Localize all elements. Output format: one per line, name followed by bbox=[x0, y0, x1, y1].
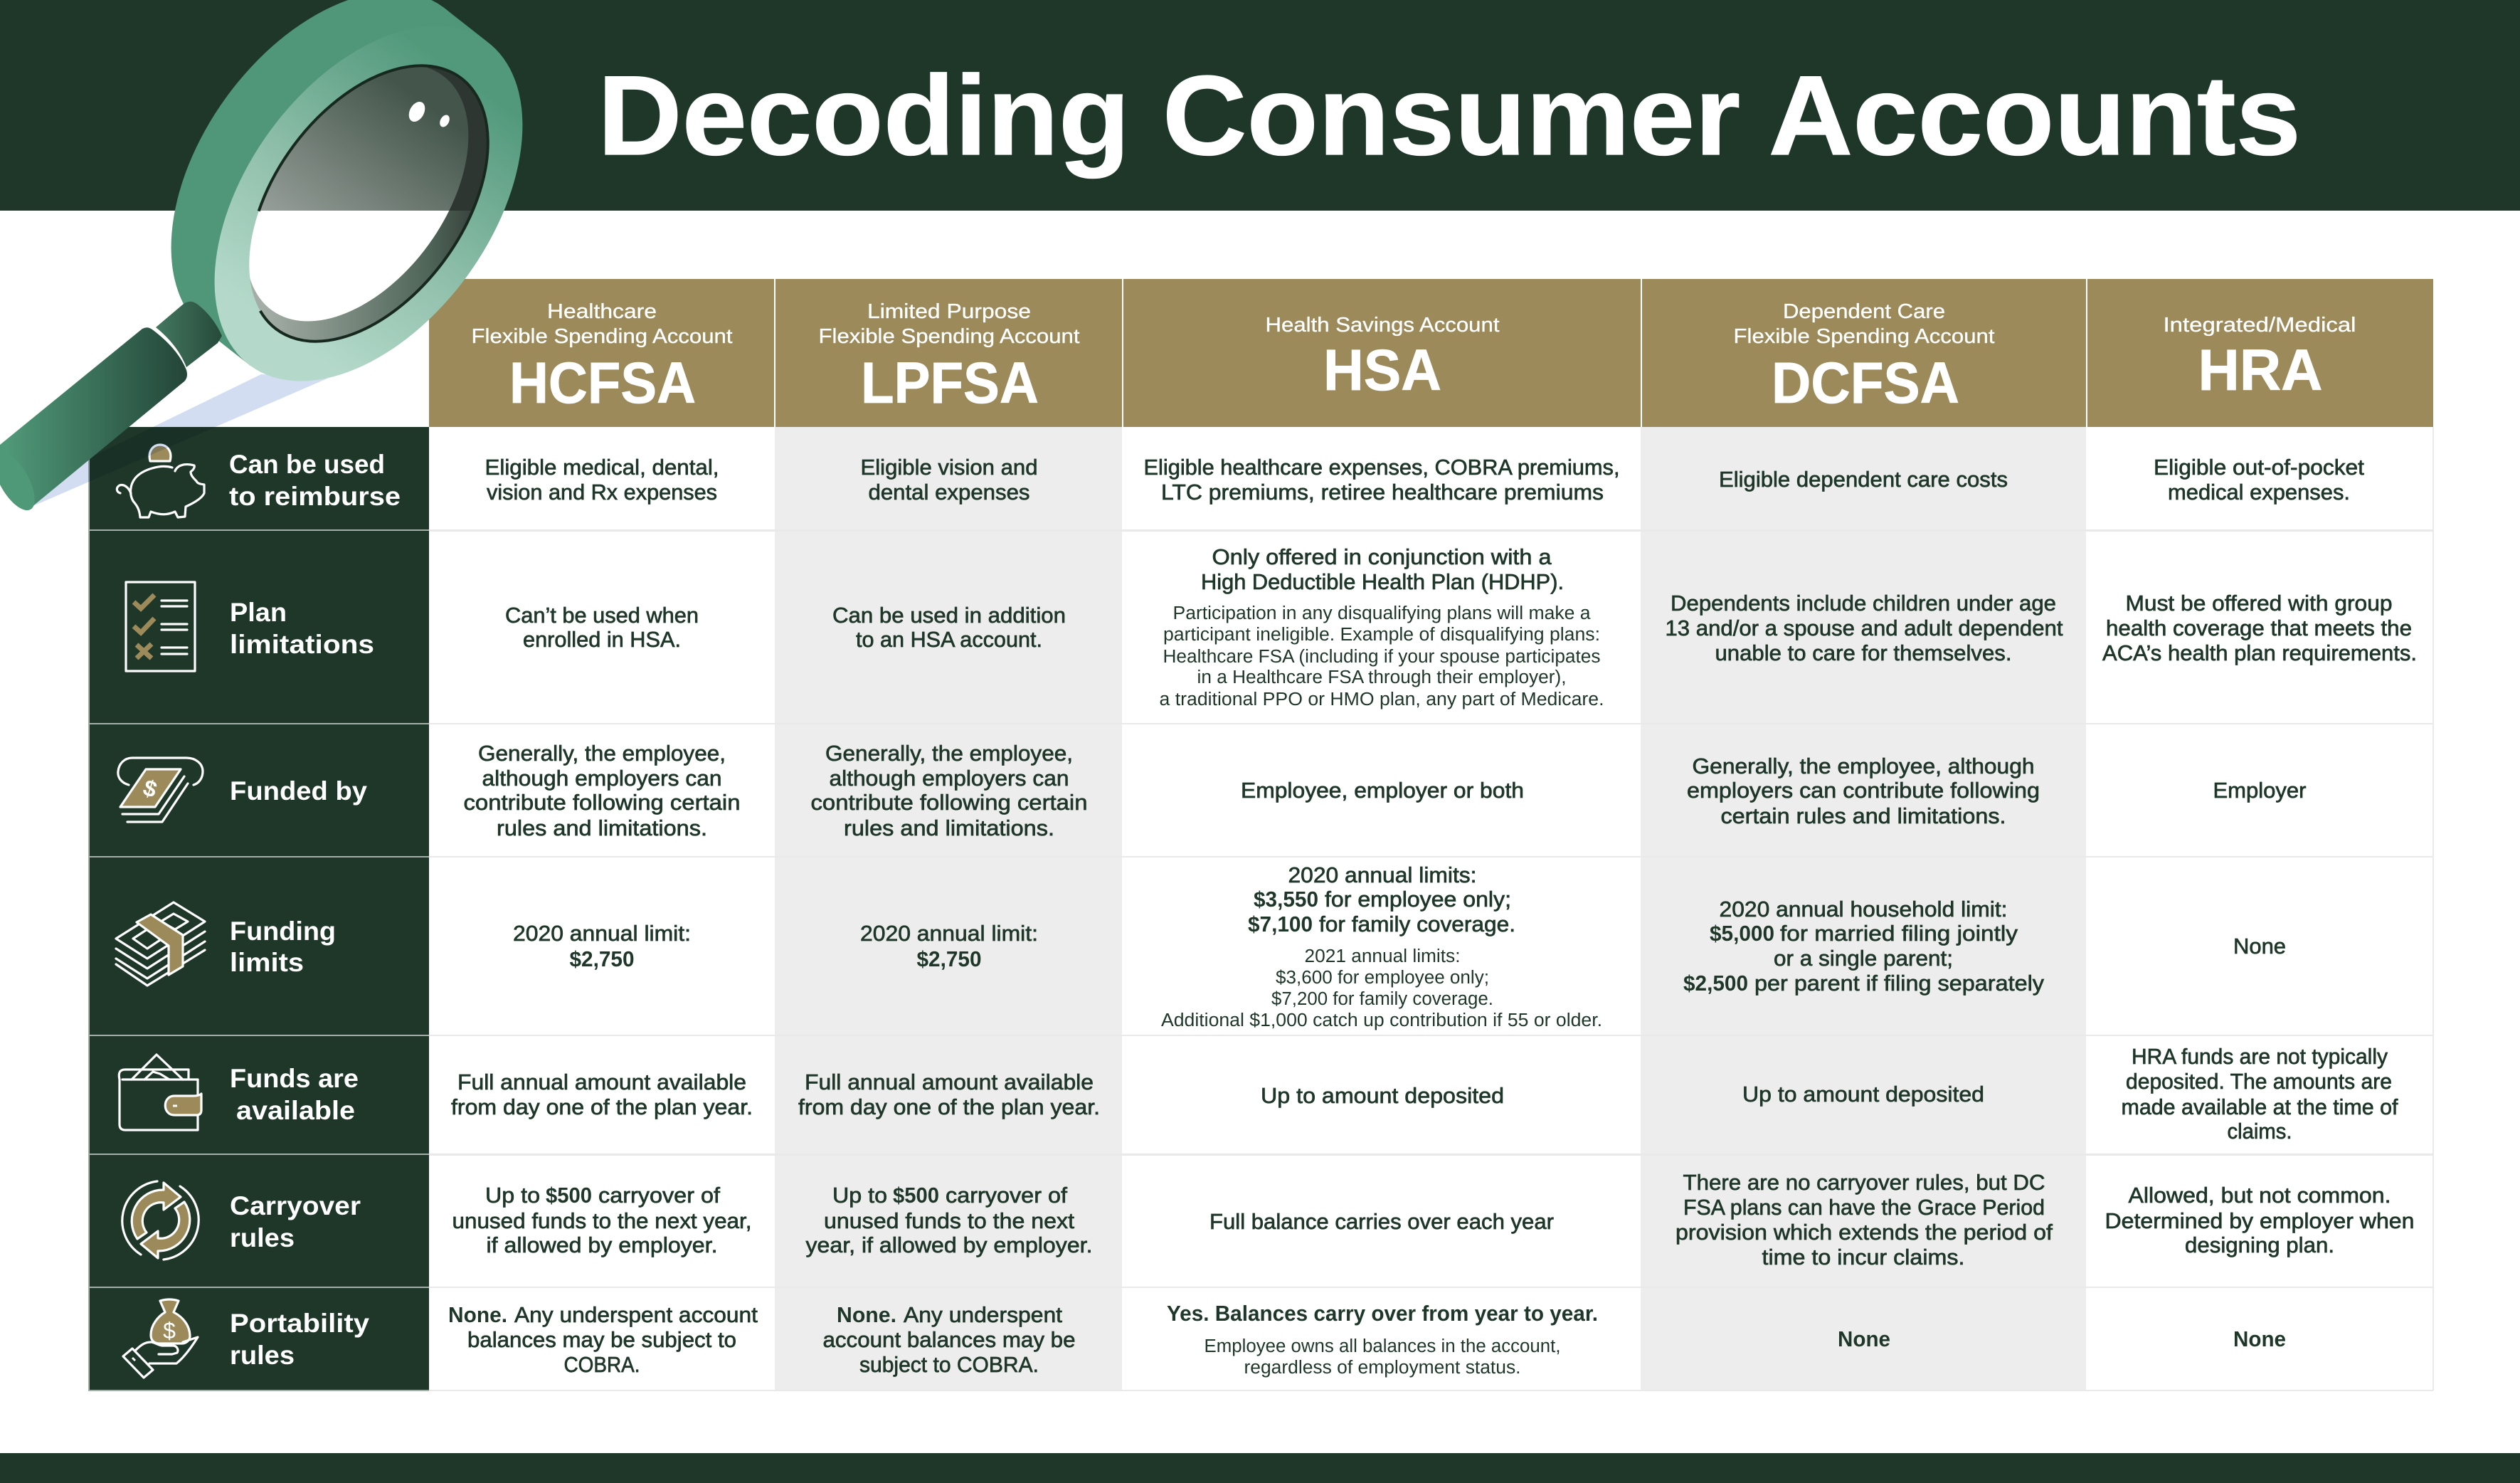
title: Decoding Consumer Accounts bbox=[598, 52, 2301, 179]
cell: HSA limits bbox=[1161, 863, 1602, 1030]
cell: HRA available: made available at the time of bbox=[2122, 1095, 2398, 1119]
header: HRA: Integrated/Medical bbox=[2163, 314, 2356, 337]
cell: LPFSA limits bbox=[860, 922, 1038, 971]
header: HSA: HSA bbox=[1323, 338, 1441, 403]
cell: HCFSA portability: COBRA. bbox=[563, 1353, 640, 1377]
cell: HSA reimburse: LTC premiums, retiree healthcare premiums bbox=[1161, 480, 1604, 505]
cell: HCFSA portability: None. bbox=[448, 1303, 507, 1327]
cell: HSA limitations: participant ineligible. Example of disqualifying plans: bbox=[1163, 625, 1600, 645]
cell: HRA available: deposited. The amounts are bbox=[2126, 1070, 2392, 1094]
cell: HRA limitations: Must be offered with group bbox=[2126, 591, 2392, 616]
label: funds are available: Funds are bbox=[230, 1064, 359, 1093]
cell: HCFSA reimburse: vision and Rx expenses bbox=[487, 480, 717, 505]
icon: carryover arrows bbox=[122, 1181, 198, 1260]
label: carryover rules: rules bbox=[230, 1223, 295, 1252]
label: funding limits: Funding bbox=[230, 917, 336, 946]
row: funds are available bbox=[451, 1045, 2398, 1144]
cell: HSA limits: 2020 annual limits: bbox=[1288, 863, 1477, 887]
label: can be used to reimburse bbox=[229, 450, 401, 511]
cell: HSA limitations: High Deductible Health Plan (HDHP). bbox=[1201, 570, 1564, 594]
footer bar bbox=[0, 1453, 2520, 1483]
cell: HCFSA reimburse: Eligible medical, dental, bbox=[485, 455, 719, 480]
row: carryover rules bbox=[452, 1171, 2415, 1270]
row: funding limits bbox=[513, 863, 2286, 1030]
label: funds are available bbox=[230, 1064, 359, 1125]
cell: HRA carryover: Determined by employer when bbox=[2105, 1209, 2415, 1233]
cell: DCFSA limits: 2020 annual household limit: bbox=[1719, 897, 2008, 922]
header: DCFSA bbox=[1733, 300, 1995, 416]
cell: LPFSA portability bbox=[822, 1303, 1076, 1377]
cell: HSA portability: Employee owns all balances in the account, bbox=[1204, 1336, 1561, 1356]
cell: HCFSA limitations: Can’t be used when bbox=[505, 603, 699, 628]
icon: piggy bank bbox=[117, 445, 204, 517]
header: HRA bbox=[2163, 314, 2356, 403]
label: funding limits: limits bbox=[230, 948, 304, 977]
cell: HRA limitations bbox=[2102, 591, 2417, 665]
cell: LPFSA funded by: contribute following certain bbox=[811, 791, 1087, 815]
cell: HCFSA reimburse bbox=[485, 455, 719, 505]
cell: HSA limitations: Participation in any disqualifying plans will make a bbox=[1172, 603, 1591, 623]
cell: LPFSA available: from day one of the plan year. bbox=[798, 1095, 1100, 1119]
cell: LPFSA carryover: year, if allowed by employer. bbox=[805, 1233, 1093, 1257]
cell: DCFSA available: Up to amount deposited bbox=[1742, 1082, 1984, 1107]
label: portability rules: Portability bbox=[230, 1309, 369, 1338]
header: LPFSA: Flexible Spending Account bbox=[818, 325, 1080, 348]
cell: HCFSA carryover bbox=[452, 1183, 751, 1257]
cell: DCFSA reimburse: Eligible dependent care costs bbox=[1719, 468, 2008, 492]
cell: HCFSA limitations: enrolled in HSA. bbox=[523, 628, 681, 652]
cell: HSA limitations: a traditional PPO or HMO plan, any part of Medicare. bbox=[1160, 690, 1604, 709]
cell: HRA limitations: ACA’s health plan requirements. bbox=[2102, 641, 2417, 665]
cell: HRA funded by: Employer bbox=[2213, 779, 2307, 803]
cell: DCFSA carryover: time to incur claims. bbox=[1762, 1245, 1965, 1270]
cell: HSA limitations: Only offered in conjunction with a bbox=[1212, 545, 1552, 569]
cell: DCFSA limits: per parent if filing separately bbox=[1754, 971, 2045, 996]
magnifier rim: back bbox=[108, 0, 542, 403]
cell: HSA carryover: Full balance carries over each year bbox=[1209, 1210, 1554, 1234]
cell: DCFSA limits bbox=[1683, 897, 2045, 996]
cell: LPFSA portability: account balances may be bbox=[822, 1328, 1076, 1352]
cell: LPFSA portability: Any underspent bbox=[904, 1303, 1063, 1327]
header: HRA: HRA bbox=[2198, 338, 2322, 403]
cell: HRA reimburse: Eligible out-of-pocket bbox=[2154, 455, 2365, 480]
icon: money bag in hand bbox=[123, 1299, 198, 1378]
row: funded by bbox=[464, 742, 2307, 840]
cell: HCFSA funded by bbox=[464, 742, 740, 840]
cell: HCFSA funded by: contribute following certain bbox=[464, 791, 740, 815]
cell: DCFSA funded by bbox=[1687, 754, 2040, 828]
cell: HCFSA funded by: Generally, the employee, bbox=[478, 742, 726, 766]
cell: HRA available bbox=[2122, 1045, 2398, 1144]
label: plan limitations: Plan bbox=[230, 598, 287, 627]
cell: LPFSA limitations bbox=[832, 603, 1066, 652]
label: carryover rules: Carryover bbox=[230, 1191, 361, 1220]
cell: LPFSA reimburse: Eligible vision and bbox=[861, 455, 1037, 480]
cell: DCFSA limits: for married filing jointly bbox=[1780, 922, 2018, 946]
cell: LPFSA carryover: Up to bbox=[832, 1183, 887, 1208]
header: LPFSA: Limited Purpose bbox=[867, 300, 1031, 323]
cell: HSA available: Up to amount deposited bbox=[1261, 1084, 1504, 1108]
label: portability rules bbox=[230, 1309, 369, 1370]
cell: LPFSA reimburse bbox=[861, 455, 1037, 505]
cell: LPFSA available bbox=[798, 1070, 1100, 1119]
cell: HSA funded by: Employee, employer or both bbox=[1241, 779, 1524, 803]
cell: HSA limits: $3,600 for employee only; bbox=[1276, 968, 1489, 988]
cell: DCFSA carryover: provision which extends the period of bbox=[1675, 1220, 2053, 1245]
cell: LPFSA carryover: $500 bbox=[893, 1183, 939, 1208]
column headers bbox=[429, 279, 2433, 427]
header: HSA: Health Savings Account bbox=[1265, 314, 1500, 337]
cell: DCFSA carryover bbox=[1675, 1171, 2053, 1270]
cell: LPFSA available: Full annual amount available bbox=[805, 1070, 1094, 1094]
header banner bbox=[0, 0, 2520, 211]
row: plan limitations bbox=[505, 545, 2417, 709]
label: funded by: Funded by bbox=[230, 776, 367, 806]
cell: LPFSA limits: $2,750 bbox=[916, 947, 982, 971]
icon: money bag in hand: $ bbox=[163, 1318, 176, 1344]
cell: HRA reimburse bbox=[2154, 455, 2365, 505]
cell: HRA portability: None bbox=[2233, 1327, 2286, 1351]
header: HCFSA: Flexible Spending Account bbox=[471, 325, 733, 348]
label: plan limitations: limitations bbox=[230, 630, 374, 659]
cell: HCFSA carryover: carryover of bbox=[598, 1183, 721, 1208]
cell: DCFSA carryover: There are no carryover rules, but DC bbox=[1683, 1171, 2045, 1195]
cell: HSA limits: 2021 annual limits: bbox=[1305, 946, 1460, 966]
cell: HCFSA portability: Any underspent account bbox=[514, 1303, 758, 1327]
cell: HSA limits: for family coverage. bbox=[1319, 912, 1515, 936]
magnifier rim: front bbox=[152, 0, 586, 438]
cell: HCFSA available bbox=[451, 1070, 753, 1119]
cell: HCFSA limitations bbox=[505, 603, 699, 652]
cell: DCFSA limitations: Dependents include children under age bbox=[1671, 591, 2056, 616]
magnifying glass illustration bbox=[0, 0, 522, 511]
cell: DCFSA limitations: 13 and/or a spouse and adult dependent bbox=[1665, 616, 2063, 640]
cell: HSA limitations: Healthcare FSA (including if your spouse participates bbox=[1163, 647, 1601, 667]
cell: LPFSA funded by: although employers can bbox=[830, 766, 1069, 791]
cell: HCFSA funded by: although employers can bbox=[482, 766, 721, 791]
cell: HSA limits: for employee only; bbox=[1325, 887, 1511, 912]
cell: LPFSA limits: 2020 annual limit: bbox=[860, 922, 1038, 946]
cell: HSA reimburse bbox=[1144, 455, 1619, 505]
cell: LPFSA limitations: Can be used in addition bbox=[832, 603, 1066, 628]
header: LPFSA: LPFSA bbox=[861, 351, 1039, 416]
label: can be used to reimburse: to reimburse bbox=[229, 482, 401, 511]
cell: DCFSA funded by: certain rules and limitations. bbox=[1720, 804, 2006, 828]
cell: HRA available: HRA funds are not typically bbox=[2132, 1045, 2388, 1069]
cell: HCFSA carryover: if allowed by employer. bbox=[487, 1233, 717, 1257]
cell: HRA available: claims. bbox=[2227, 1119, 2292, 1144]
cell: HSA limitations: in a Healthcare FSA through their employer), bbox=[1197, 667, 1567, 687]
icon: dollar bill stack: $ bbox=[140, 774, 160, 803]
header: HCFSA: Healthcare bbox=[547, 300, 657, 323]
cell: HCFSA limits bbox=[513, 922, 691, 971]
label: funds are available: available bbox=[236, 1096, 355, 1125]
cell: LPFSA carryover: unused funds to the next bbox=[824, 1209, 1075, 1233]
cell: DCFSA portability: None bbox=[1838, 1327, 1890, 1351]
cell: HRA limitations: health coverage that meets the bbox=[2106, 616, 2412, 640]
cell: HRA carryover bbox=[2105, 1183, 2415, 1257]
header: HSA bbox=[1265, 314, 1500, 403]
cell: HCFSA funded by: rules and limitations. bbox=[497, 816, 707, 840]
cell: HSA limits: Additional $1,000 catch up contribution if 55 or older. bbox=[1161, 1010, 1602, 1030]
cell: LPFSA funded by bbox=[811, 742, 1087, 840]
cell: HCFSA carryover: unused funds to the next year, bbox=[452, 1209, 751, 1233]
cell: LPFSA portability: None. bbox=[837, 1303, 896, 1327]
header: HCFSA: HCFSA bbox=[509, 351, 696, 416]
cell: DCFSA carryover: FSA plans can have the Grace Period bbox=[1683, 1196, 2045, 1220]
icon: cash bundle bbox=[116, 902, 205, 986]
cell: HCFSA available: from day one of the plan year. bbox=[451, 1095, 753, 1119]
cell: HRA limits: None bbox=[2233, 934, 2286, 959]
cell: LPFSA carryover: carryover of bbox=[946, 1183, 1068, 1208]
cell: HSA portability: Yes. Balances carry over from year to year. bbox=[1167, 1302, 1598, 1326]
cell: DCFSA limitations bbox=[1665, 591, 2063, 665]
cell: HSA limits: $7,200 for family coverage. bbox=[1271, 989, 1493, 1009]
cell: HCFSA carryover: $500 bbox=[546, 1183, 592, 1208]
label: funding limits bbox=[230, 917, 336, 977]
cell: HSA reimburse: Eligible healthcare expenses, COBRA premiums, bbox=[1144, 455, 1619, 480]
cell: HCFSA carryover: Up to bbox=[485, 1183, 540, 1208]
header: HCFSA bbox=[471, 300, 733, 416]
label: can be used to reimburse: Can be used bbox=[229, 450, 385, 479]
magnifying glass shadow bbox=[21, 374, 329, 507]
cell: HRA carryover: Allowed, but not common. bbox=[2129, 1183, 2391, 1208]
cell: LPFSA limitations: to an HSA account. bbox=[856, 628, 1042, 652]
cell: HRA reimburse: medical expenses. bbox=[2168, 480, 2350, 505]
cell: HSA limits: $7,100 bbox=[1248, 912, 1313, 936]
cell: LPFSA reimburse: dental expenses bbox=[868, 480, 1030, 505]
cell: HSA limits: $3,550 bbox=[1254, 887, 1318, 912]
cell: HCFSA portability: balances may be subject to bbox=[467, 1328, 736, 1352]
cell: LPFSA funded by: Generally, the employee, bbox=[825, 742, 1073, 766]
cell: HSA portability: regardless of employment status. bbox=[1244, 1358, 1521, 1378]
cell: DCFSA limits: $2,500 bbox=[1683, 971, 1748, 996]
row labels bbox=[229, 450, 401, 1370]
header: DCFSA: DCFSA bbox=[1772, 351, 1959, 416]
comparison table background bbox=[88, 427, 2434, 1391]
header: LPFSA bbox=[818, 300, 1080, 416]
magnifier lens bbox=[249, 64, 489, 343]
cell: LPFSA funded by: rules and limitations. bbox=[844, 816, 1054, 840]
label: portability rules: rules bbox=[230, 1341, 295, 1370]
cell: HCFSA portability bbox=[448, 1303, 758, 1377]
header: DCFSA: Dependent Care bbox=[1783, 300, 1945, 323]
cell: HCFSA available: Full annual amount available bbox=[457, 1070, 746, 1094]
icon: checklist bbox=[126, 582, 195, 671]
cell: DCFSA limits: $5,000 bbox=[1710, 922, 1774, 946]
cell: LPFSA carryover bbox=[805, 1183, 1093, 1257]
cell: DCFSA funded by: employers can contribute following bbox=[1687, 779, 2040, 803]
row: can be used to reimburse bbox=[485, 455, 2365, 505]
icon: wallet bbox=[119, 1055, 201, 1130]
label: carryover rules bbox=[230, 1191, 361, 1252]
cell: DCFSA funded by: Generally, the employee, although bbox=[1692, 754, 2035, 779]
row: portability rules bbox=[448, 1302, 2286, 1378]
magnifier handle bbox=[0, 302, 222, 517]
cell: HSA limitations bbox=[1160, 545, 1604, 709]
cell: HSA portability bbox=[1167, 1302, 1598, 1378]
cell: DCFSA limitations: unable to care for themselves. bbox=[1715, 641, 2012, 665]
icon: dollar bill stack bbox=[118, 758, 203, 822]
cell: HCFSA limits: $2,750 bbox=[569, 947, 635, 971]
label: plan limitations bbox=[230, 598, 374, 659]
cell: LPFSA portability: subject to COBRA. bbox=[859, 1353, 1039, 1377]
cell: DCFSA limits: or a single parent; bbox=[1774, 946, 1953, 971]
cell: HRA carryover: designing plan. bbox=[2185, 1233, 2334, 1257]
header: DCFSA: Flexible Spending Account bbox=[1733, 325, 1995, 348]
cell: HCFSA limits: 2020 annual limit: bbox=[513, 922, 691, 946]
